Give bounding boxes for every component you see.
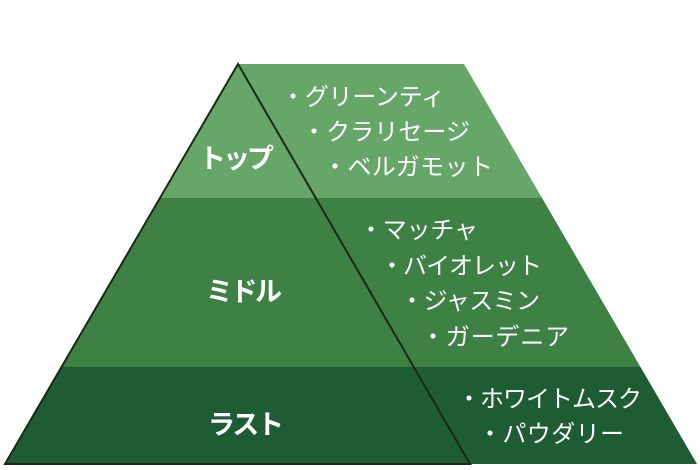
- band: last notes background: [5, 367, 697, 464]
- triangle outline: [5, 64, 470, 464]
- list: middle notes: ・ジャスミン: [400, 288, 540, 315]
- list: top notes: [281, 84, 493, 181]
- list: last notes: [457, 386, 642, 448]
- label: last: ラスト: [208, 410, 284, 440]
- list: top notes: ・グリーンティ: [281, 84, 445, 111]
- list: last notes: ・ホワイトムスク: [457, 386, 642, 413]
- label: top: トップ: [199, 144, 274, 174]
- list: last notes: ・パウダリー: [478, 421, 624, 448]
- list: top notes: ・ベルガモット: [323, 154, 493, 181]
- list: middle notes: ・バイオレット: [380, 253, 542, 280]
- band: top notes background: [160, 64, 542, 198]
- list: middle notes: [359, 217, 569, 351]
- list: middle notes: ・ガーデニア: [421, 324, 569, 351]
- band: middle notes background: [62, 198, 640, 367]
- label: middle: ミドル: [206, 277, 282, 307]
- list: top notes: ・クラリセージ: [302, 119, 470, 146]
- list: middle notes: ・マッチャ: [359, 217, 478, 244]
